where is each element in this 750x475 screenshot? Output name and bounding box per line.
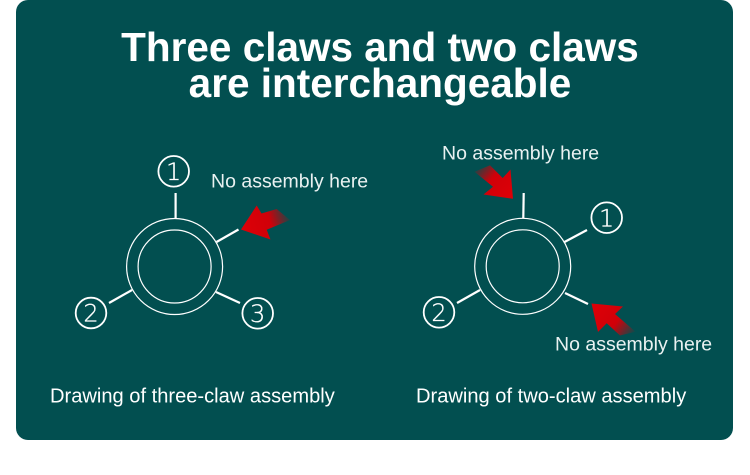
title <box>121 24 639 106</box>
diagram: two-claw assembly <box>416 142 712 408</box>
badge 1: 1 <box>599 204 614 232</box>
badge 3: 3 <box>250 300 265 328</box>
ring <box>127 218 223 314</box>
badge 2: 2 <box>83 300 99 328</box>
claw ticks <box>457 193 588 304</box>
ring <box>475 218 571 314</box>
caption: two-claw: Drawing of two-claw assembly <box>416 386 686 408</box>
badge 1 <box>158 156 189 187</box>
badge 1 <box>591 202 622 233</box>
badge 2: 2 <box>431 299 447 327</box>
label: top no assembly here: No assembly here <box>442 142 599 164</box>
badge 3 <box>242 298 273 329</box>
badge 2 <box>76 298 106 328</box>
caption: three-claw: Drawing of three-claw assembly <box>50 386 335 408</box>
claw ticks <box>109 193 240 303</box>
title: Three claws and two claws <box>121 24 639 70</box>
diagram: three-claw assembly <box>50 156 368 408</box>
label: no assembly here: No assembly here <box>211 170 368 192</box>
label: bottom no assembly here: No assembly here <box>555 334 712 356</box>
arrow: top no assembly point <box>474 165 513 199</box>
arrow: no assembly point <box>241 206 290 240</box>
badge 1: 1 <box>166 158 181 186</box>
arrow: bottom no assembly point <box>592 304 636 336</box>
badge 2 <box>424 297 454 328</box>
title: are interchangeable <box>189 60 571 106</box>
